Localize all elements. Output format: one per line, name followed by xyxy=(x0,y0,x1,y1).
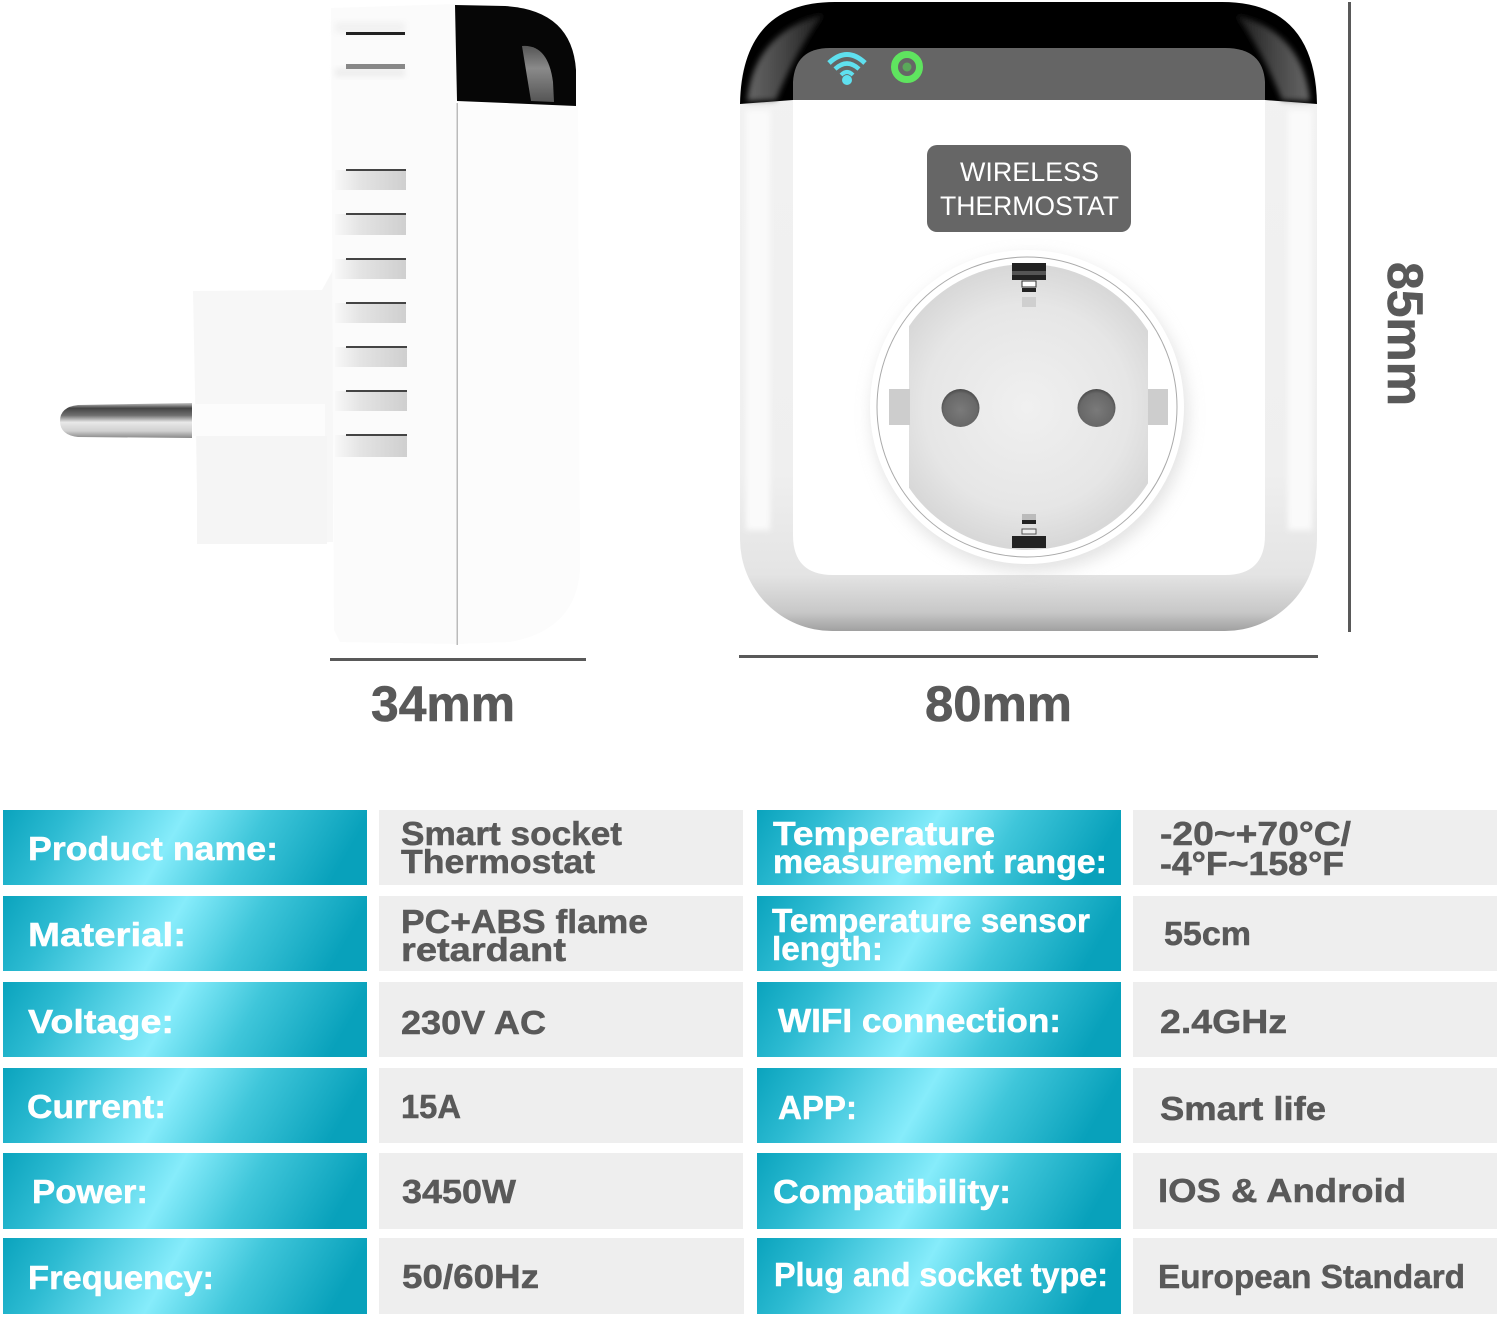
row: frequency: 50/60Hz xyxy=(402,1258,539,1295)
side width dimension: 34mm xyxy=(371,676,515,732)
row: sensor length: 55cm xyxy=(1164,915,1251,952)
side width dimension xyxy=(330,658,586,732)
row: material: retardant xyxy=(401,931,566,968)
height dimension: 85mm xyxy=(1377,262,1433,406)
row: app: Smart life xyxy=(1160,1090,1326,1127)
row: plug and socket type: European Standard xyxy=(1158,1258,1465,1295)
row: frequency: Frequency: xyxy=(28,1259,214,1296)
row: wifi: 2.4GHz xyxy=(1160,1003,1287,1040)
row: compatibility xyxy=(757,1153,1497,1229)
row: sensor length xyxy=(757,896,1497,971)
row: app xyxy=(757,1068,1497,1143)
outer shell xyxy=(740,2,1317,631)
row: material xyxy=(3,896,743,971)
row: temperature range: measurement range: xyxy=(773,843,1107,880)
row: current: Current: xyxy=(27,1088,166,1125)
row: voltage xyxy=(3,982,743,1057)
row: product name: Smart socket xyxy=(401,815,622,852)
row: current xyxy=(3,1068,743,1143)
row: product name: Product name: xyxy=(28,830,278,867)
label plate: wireless thermostat: THERMOSTAT xyxy=(940,191,1119,221)
side view of thermostat xyxy=(60,4,580,645)
row: wifi xyxy=(757,982,1497,1057)
row: sensor length: length: xyxy=(772,930,883,967)
icon: green power ring xyxy=(894,54,920,80)
row: frequency xyxy=(3,1238,744,1314)
row: compatibility: Compatibility: xyxy=(773,1173,1011,1210)
row: plug and socket type xyxy=(757,1238,1497,1314)
front width dimension: 80mm xyxy=(925,676,1072,732)
row: compatibility: IOS & Android xyxy=(1158,1172,1406,1209)
row: current: 15A xyxy=(401,1088,461,1125)
black top cover xyxy=(455,5,576,106)
label plate: wireless thermostat xyxy=(927,145,1131,232)
black band reflections xyxy=(747,14,1310,101)
socket xyxy=(870,250,1188,572)
height dimension xyxy=(1348,2,1433,632)
inner white face xyxy=(793,100,1265,575)
row: temperature range: Temperature xyxy=(773,815,995,852)
row: power: 3450W xyxy=(402,1173,517,1210)
row: product name xyxy=(3,810,743,885)
row: material: PC+ABS flame xyxy=(401,903,648,940)
row: product name: Thermostat xyxy=(401,843,595,880)
row: power: Power: xyxy=(32,1173,148,1210)
front view of thermostat xyxy=(740,2,1317,631)
row: app: APP: xyxy=(778,1089,857,1126)
row: temperature range: -20~+70°C/ xyxy=(1160,815,1351,852)
front housing xyxy=(458,102,580,644)
icon: wifi xyxy=(829,54,865,85)
row: temperature range: -4°F~158°F xyxy=(1160,845,1344,882)
rear housing with vents xyxy=(331,4,458,644)
row: sensor length: Temperature sensor xyxy=(772,902,1090,939)
row: wifi: WIFI connection: xyxy=(778,1002,1061,1039)
black top band xyxy=(740,2,1317,104)
specification table xyxy=(3,810,1497,1314)
row: material: Material: xyxy=(28,916,186,953)
grey display strip xyxy=(793,48,1265,100)
row: power xyxy=(3,1153,743,1229)
row: plug and socket type: Plug and socket type: xyxy=(774,1256,1108,1293)
label plate: wireless thermostat: WIRELESS xyxy=(960,157,1099,187)
row: voltage: Voltage: xyxy=(28,1003,174,1040)
shell highlights xyxy=(746,110,1312,530)
plug body xyxy=(193,270,333,544)
row: temperature range xyxy=(757,810,1497,885)
metal plug pin xyxy=(60,403,192,438)
front width dimension xyxy=(739,655,1318,732)
row: voltage: 230V AC xyxy=(401,1004,546,1041)
